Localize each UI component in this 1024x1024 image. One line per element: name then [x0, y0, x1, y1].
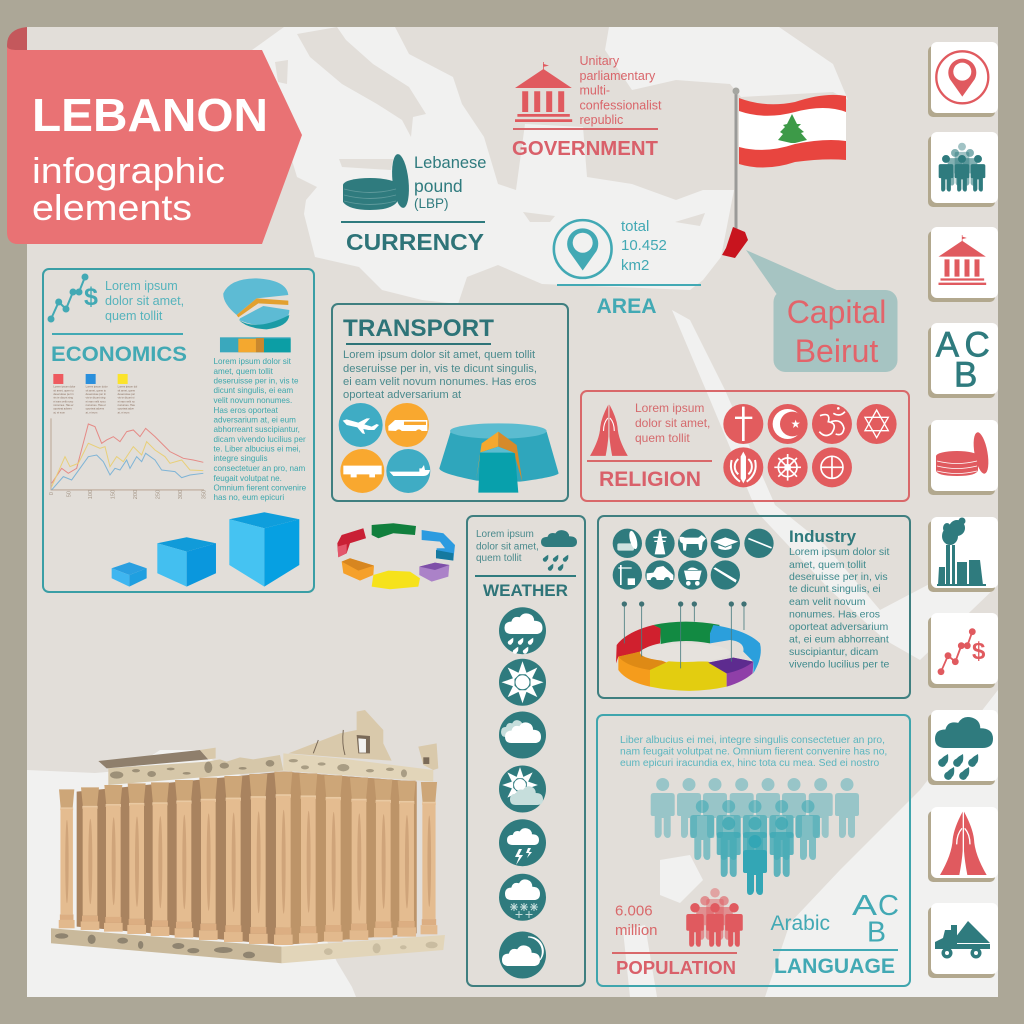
panel: economics: Has eros oporteat	[214, 406, 279, 415]
title banner	[7, 27, 302, 244]
panel: economics: dolor sit amet,	[105, 294, 184, 308]
government block: parliamentary	[580, 69, 656, 83]
icon: government building	[515, 62, 572, 122]
currency block: (LBP)	[414, 196, 449, 211]
line chart: ei eam velit novu	[53, 399, 74, 403]
icon: map pin	[554, 220, 612, 278]
panel: economics: adversarium at, ei eum	[214, 416, 296, 424]
panel: religion: dolor sit amet,	[635, 416, 710, 430]
panel: economics: deseruisse per in, vis te	[214, 376, 299, 386]
government block: GOVERNMENT	[512, 138, 658, 160]
panel: population and language: nam feugait volutpat ne. Omnium fierent convenire has no,	[620, 746, 887, 758]
line chart: Lorem ipsum dol	[118, 385, 138, 389]
panel: economics: abhorreant suscipiantur,	[214, 425, 300, 434]
line chart: ei eam velit novu	[86, 399, 106, 403]
panel: industry: deseruisse per in, vis	[789, 571, 888, 583]
panel: economics: feugait volutpat ne.	[214, 474, 282, 483]
icon card: currency	[928, 420, 998, 495]
3D cubes	[112, 512, 299, 587]
currency block: Lebanese	[414, 154, 486, 172]
line chart: 0	[49, 492, 55, 495]
panel: weather: Lorem ipsum	[476, 529, 534, 540]
panel: weather: WEATHER	[483, 581, 568, 600]
panel: economics: Omnium fierent convenire	[214, 484, 307, 492]
line chart: ei eam velit no	[118, 399, 135, 403]
illustration: Baalbek temple	[51, 710, 445, 963]
line chart: at, ei eum	[53, 410, 66, 414]
line chart: 350	[201, 490, 207, 499]
panel: population and language: B	[867, 917, 886, 949]
panel: weather: dolor sit amet,	[476, 542, 539, 552]
panel: population and language: LANGUAGE	[774, 955, 895, 978]
small segmented ring chart	[337, 523, 455, 589]
panel: industry: suscipiantur, dicam	[789, 646, 879, 658]
panel: industry: eam velit novum	[789, 596, 866, 608]
icon card: location	[928, 42, 998, 117]
government block: Unitary	[580, 54, 620, 68]
line chart: oporteat advers	[86, 407, 105, 411]
icon: thunderstorm	[499, 819, 546, 866]
icon: sun	[499, 659, 546, 706]
area block: total	[621, 218, 649, 235]
government block	[512, 54, 662, 160]
line chart: at, ei eum	[86, 410, 98, 414]
line chart: deseruisse per	[118, 392, 135, 396]
icon: coins	[343, 153, 411, 210]
line chart: nonumes. Has er	[86, 403, 106, 407]
industry icons	[613, 529, 774, 590]
panel: religion	[581, 391, 909, 501]
panel: transport: Lorem ipsum dolor sit amet, quem tollit	[343, 349, 536, 361]
panel: economics: velit novum nonumes.	[214, 396, 292, 405]
flag	[739, 95, 846, 168]
panel: economics: amet, quem tollit	[214, 367, 274, 376]
panel: population and language: Arabic	[770, 912, 830, 935]
line chart: oporteat adve	[118, 407, 134, 411]
line chart: 250	[155, 490, 161, 499]
icon: rain cloud	[541, 530, 577, 571]
panel: population and language	[597, 715, 910, 986]
icon: growth chart with dollar: $	[84, 283, 98, 311]
icon card: religion	[928, 807, 998, 882]
panel: economics: Lorem ipsum	[105, 279, 178, 293]
panel: economics: integre singulis	[214, 454, 268, 463]
icon card: language: C	[964, 326, 990, 365]
line chart: at, ei eum	[118, 410, 130, 414]
line chart: deseruisse per in	[86, 392, 106, 396]
panel: economics: Lorem ipsum dolor sit	[214, 357, 292, 366]
government block: republic	[580, 113, 623, 127]
panel: transport: TRANSPORT	[343, 315, 494, 342]
panel: religion: RELIGION	[599, 468, 701, 491]
panel: industry: amet, quem tollit	[789, 559, 866, 571]
panel: population and language: C	[878, 890, 899, 922]
icon card: people	[928, 132, 998, 207]
line chart: Lorem ipsum dolor	[53, 385, 75, 389]
icon card: language: B	[954, 356, 977, 395]
icon card: weather	[928, 710, 998, 785]
area block: AREA	[596, 295, 656, 318]
panel: religion: quem tollit	[635, 431, 690, 445]
title banner: elements	[32, 187, 192, 228]
line chart: vis te dicunt sing	[53, 396, 73, 400]
panel: industry	[598, 516, 910, 698]
flag of Lebanon on pole	[722, 88, 846, 258]
cylinder chart	[439, 423, 559, 493]
line chart: nonumes. Has	[118, 403, 135, 407]
title banner: LEBANON	[32, 89, 268, 141]
icon column	[928, 42, 998, 978]
area block: km2	[621, 257, 649, 274]
currency block: pound	[414, 176, 463, 196]
panel: population and language: A	[852, 890, 878, 922]
panel: population and language: Liber albucius ei mei, integre singulis consectetuer an pro,	[620, 735, 885, 746]
icon: rain	[499, 607, 546, 654]
government block: confessionalist	[580, 98, 662, 112]
panel: economics: dicunt singulis, ei eam	[214, 386, 293, 395]
panel: industry: vivendo lucilius per te	[789, 659, 890, 671]
line chart: oporteat advers	[53, 407, 72, 411]
icon: cloudy	[499, 712, 546, 758]
line chart: 300	[178, 490, 184, 499]
icon: sun behind cloud	[499, 766, 546, 812]
capital callout: Beirut	[795, 333, 878, 369]
capital callout	[746, 250, 898, 372]
industry ring chart	[616, 601, 761, 691]
panel: industry: te dicunt singulis, ei	[789, 583, 881, 595]
panel: economics	[43, 269, 314, 592]
panel: industry: oporteat adversarium	[789, 621, 888, 633]
panel: economics: te. Liber albucius ei mei,	[214, 444, 301, 454]
panel: economics: ECONOMICS	[51, 342, 187, 366]
icon card: transport	[928, 903, 998, 978]
icon card: language	[928, 323, 998, 398]
area block	[554, 218, 701, 318]
icon card: economy	[928, 613, 998, 688]
icon: growth chart with dollar	[48, 274, 98, 322]
panel: economics: consectetuer an pro, nam	[214, 464, 306, 473]
currency block	[341, 153, 486, 255]
line chart: vis te dicunt si	[118, 396, 135, 400]
icon: moon and cloud	[499, 932, 546, 978]
line chart: 150	[111, 490, 117, 499]
panel: economics: has no, eum epicuri	[214, 493, 284, 502]
icon card: economy: $	[972, 638, 986, 665]
panel: transport: deseruisse per in, vis te dicunt singulis,	[343, 363, 537, 375]
icon: snow	[499, 874, 546, 921]
line chart: 100	[88, 490, 94, 499]
panel: population and language: eum epicuri iracundia ex, hinc tota cu mea. Sed ei nostro	[620, 758, 880, 769]
capital callout: Capital	[787, 294, 886, 330]
panel: population and language: 6.006	[615, 903, 653, 920]
line chart: 200	[133, 490, 139, 499]
religious symbols	[723, 404, 897, 487]
panel: industry: Lorem ipsum dolor sit	[789, 546, 889, 558]
panel: industry: Industry	[789, 527, 857, 546]
icon card: industry	[928, 517, 998, 592]
pie chart	[220, 278, 291, 352]
line chart: nonumes. Has er	[53, 403, 74, 407]
icon card: language: A	[936, 326, 960, 365]
panel: economics: quem tollit	[105, 309, 163, 323]
panel: industry: nonumes. Has eros	[789, 609, 880, 621]
area block: 10.452	[621, 237, 667, 254]
icon card: government	[928, 227, 998, 302]
line chart	[49, 374, 207, 499]
line chart: sit amet, quem to	[86, 388, 107, 392]
marker on Beirut	[722, 227, 748, 258]
transport icons	[339, 403, 430, 493]
line chart: vis te dicunt sing	[86, 396, 106, 400]
panel: industry: at, ei eum abhorreant	[789, 634, 889, 646]
panel: population and language: million	[615, 922, 658, 939]
line chart: Lorem ipsum dolor	[86, 385, 108, 389]
panel: transport	[332, 304, 568, 501]
panel: population and language: POPULATION	[616, 957, 736, 978]
icon: praying hands	[590, 405, 628, 456]
panel: transport: ei eam velit novum nonumes. Has eros	[343, 376, 537, 388]
panel: economics: dicam vivendo lucilius per	[214, 435, 306, 444]
line chart: 50	[66, 491, 72, 497]
panel: religion: Lorem ipsum	[635, 401, 704, 415]
currency block: CURRENCY	[346, 229, 484, 255]
panel: transport: oporteat adversarium at	[343, 389, 462, 401]
line chart: sit amet, quem to	[53, 388, 74, 392]
title banner: infographic	[32, 150, 225, 191]
panel: weather	[467, 516, 585, 986]
icon: people group	[686, 888, 743, 947]
line chart: deseruisse per in	[53, 392, 74, 396]
people pyramid	[651, 778, 859, 895]
panel: weather: quem tollit	[476, 553, 522, 564]
government block: multi-	[580, 84, 610, 98]
line chart: sit amet, quem	[118, 388, 136, 392]
